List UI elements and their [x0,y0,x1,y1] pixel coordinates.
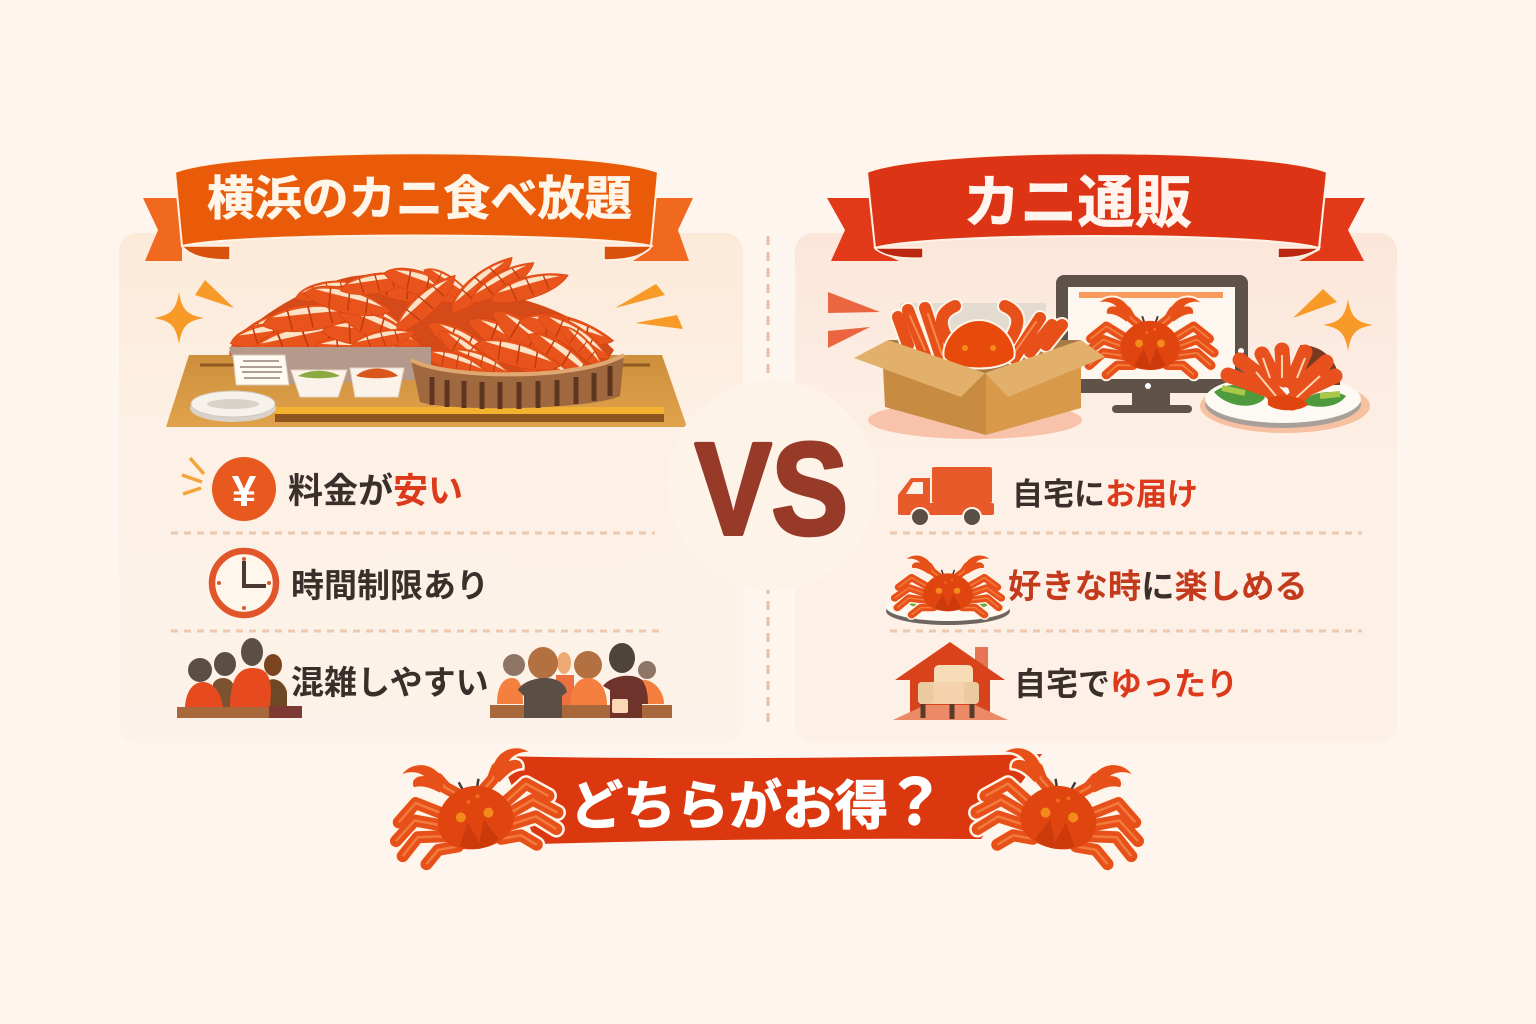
question text: どちらがお得 [570,777,888,836]
row: cheap price [182,457,463,521]
label: 好きな時に楽しめる [1008,569,1308,606]
heading text: 横浜のカニ食べ放題 [207,172,632,225]
row: time limit [212,551,489,615]
label: 自宅にお届け [1012,477,1198,512]
icon: truck [898,467,994,526]
VS badge [667,380,877,590]
icon: seated crowd right [490,643,672,718]
panel: mail order [795,233,1397,743]
tray [229,347,431,385]
heading text: カニ通販 [963,171,1192,235]
illustration: mail order box, monitor, plate [828,275,1373,439]
wooden board [166,355,687,427]
wooden tub [411,355,624,409]
row: crowded [177,638,672,718]
VS text: VS [695,415,848,562]
label: 時間制限あり [291,567,489,604]
bottom banner [384,743,1150,869]
banner: left heading [143,153,693,261]
question text: ？ [884,769,946,838]
plated crab [1200,345,1370,433]
row: home delivery [898,467,1198,526]
menu card [233,355,289,385]
accents [828,289,1373,351]
cardboard box with crab [854,303,1105,439]
panel: all-you-can-eat [119,233,743,743]
label: 料金が安い [288,472,463,511]
crab legs in box [898,306,1062,360]
crab claw pile [222,250,616,398]
sauce dishes [291,368,404,397]
icon: crab on plate [886,555,1010,625]
icon: house with armchair [893,642,1008,720]
icon: left crab [384,743,562,869]
icon: seated crowd left [177,638,302,718]
row: eat anytime [886,555,1308,625]
icon: clock [212,551,276,615]
label: 混雑しやすい [291,664,489,701]
icon: yen [182,457,276,521]
monitor [1056,275,1248,413]
banner: right heading [827,153,1365,261]
sparkle and accents [154,280,683,344]
illustration: crab buffet [154,250,687,427]
row: relax at home [893,642,1238,720]
stacked plates [190,391,276,422]
icon: right crab [972,743,1150,869]
icon: yen: ¥ [232,467,257,516]
label: 自宅でゆったり [1014,666,1238,702]
